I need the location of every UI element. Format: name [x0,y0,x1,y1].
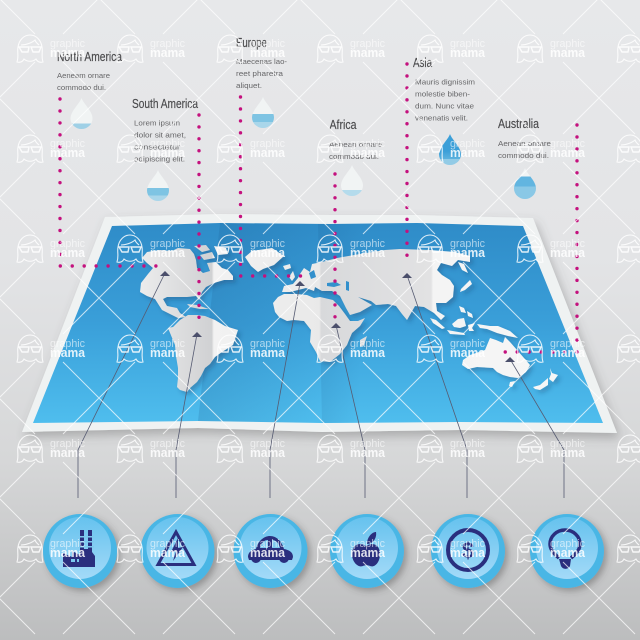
Greenland [245,248,284,272]
folded world map [22,214,617,433]
continents [140,245,558,392]
icon: water drop Asia [439,134,461,165]
dotted connector: North America [60,99,167,266]
Kamchatka and Japan [458,262,472,292]
inland seas [309,270,349,291]
Iceland and Britain [283,264,295,281]
Australia [462,337,530,378]
text block: Asia: Asia [413,55,433,70]
icon: apple [352,532,380,566]
Eurasia [282,249,470,320]
text block: Asia: molestie biben- [415,90,471,98]
dotted connector: South America [197,115,201,329]
icon: dollar coin: $ [462,538,474,563]
text block: Europe: reet pharetra [236,69,284,78]
icon: water drop Europe [252,97,274,128]
icon: water drop Africa [341,165,363,196]
map fold shading [198,223,460,423]
button: car [234,514,308,588]
map sea [33,223,603,423]
text block: Australia: commodo dui. [498,151,549,160]
text block: North America: North America [57,49,123,64]
dotted connector: Africa [333,174,337,317]
text block: Africa: commodo dui. [329,152,379,161]
text block: South America: consectetur [134,142,181,152]
text block: South America [132,96,199,164]
text block: Africa: Africa [330,117,357,132]
text block: Asia: venenatis velit. [415,114,468,122]
icon: water drop North America [70,98,92,129]
Madagascar [360,336,367,347]
Indonesia [430,318,475,335]
icon: water drop South America [147,170,169,201]
text block: Australia: Australia [498,116,540,131]
text block: Australia: Aenean ornare [498,139,551,148]
South America [168,315,238,392]
text block: Asia: Mauris dignissim [415,78,475,86]
Arctic islands [194,245,228,260]
text block: South America: South America [132,96,199,111]
Tasmania [509,381,515,387]
dotted connector: Asia [405,64,409,267]
icon: car [248,536,293,563]
text block: Asia: dum. Nunc vitae [415,102,474,110]
map paper [22,214,617,433]
text block: Europe [236,35,288,90]
icon: light bulb [550,530,580,569]
text block: Australia [498,116,551,160]
button: warning triangle [140,514,214,588]
dotted connector: Europe [240,97,301,276]
icon: factory [63,530,95,567]
text block: North America: commodo dui. [57,83,106,92]
pointer arrowheads [160,271,515,362]
text block: Africa [329,117,382,161]
button: light bulb [530,514,604,588]
dotted connector: Australia [505,125,577,352]
text block: South America: adipiscing elit. [134,154,185,164]
pointer lines [78,273,564,498]
New Zealand [533,368,558,390]
text block: South America: Lorem ipsum [134,118,180,128]
button: dollar [431,514,505,588]
North America [140,248,233,318]
icon: water drop Australia [514,168,536,199]
button: apple [330,514,404,588]
Africa [273,294,365,362]
button: factory [43,514,117,588]
text block: North America: Aeneam ornare [57,71,110,80]
icon: warning triangle [158,532,194,564]
Cuba and Caribbean [187,304,209,309]
Philippines [459,306,473,318]
text block: Europe: aliquet. [236,81,262,90]
text block: Europe: Maecenas lao- [236,57,288,66]
text block: Africa: Aenean ornare [329,140,382,149]
New Guinea [477,324,518,338]
text block: North America [57,49,123,92]
text block: South America: dolor sit amet, [134,130,186,140]
text block: Europe: Europe [236,35,267,50]
text block: Asia [413,55,475,122]
